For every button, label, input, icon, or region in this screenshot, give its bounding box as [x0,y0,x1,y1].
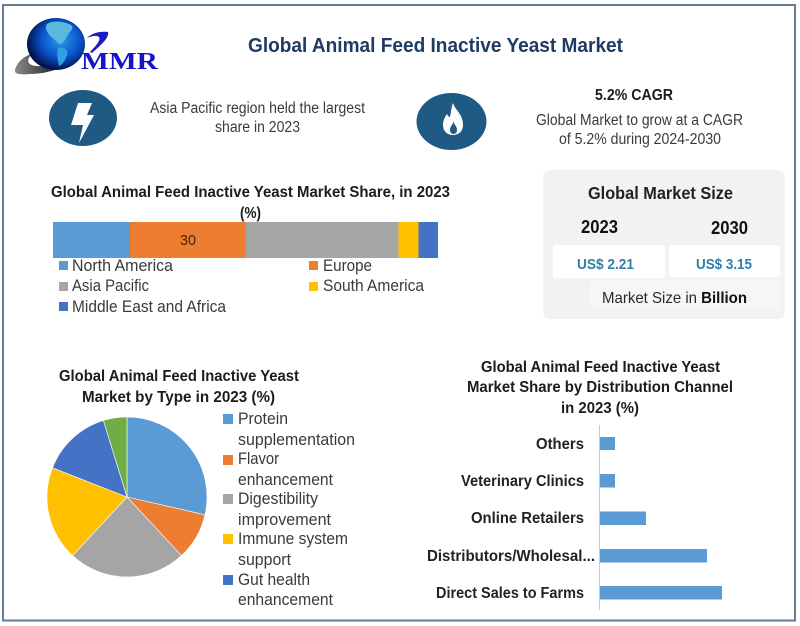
card: 2023 value [553,245,665,278]
heading: global market size: Global Market Size [588,183,733,203]
heading: share by distribution channel: Global Animal Feed Inactive Yeast [481,359,721,376]
text: CAGR callout [536,87,743,148]
legend: market by type: support [238,551,291,569]
text: CAGR callout: 5.2% CAGR [595,87,673,104]
legend: regional share [59,257,425,316]
bar chart: distribution channel: Distributors/Wholesal... [427,548,595,565]
heading: market by type: Market by Type in 2023 (%) [82,389,275,406]
heading: market share by region [51,184,450,222]
legend: market by type: enhancement [238,591,333,609]
logo: MMR globe [15,18,158,75]
heading: market share by region: Global Animal Feed Inactive Yeast Market Share, in 2023 [51,184,450,201]
legend: market by type: Flavor [238,450,279,468]
card: 2030 value: US$ 3.15 [696,256,752,273]
note: market size in billion [590,281,780,309]
stacked bar chart: regional share: 30 [180,232,196,249]
bar chart: distribution channel [427,425,722,610]
bar chart: distribution channel: Online Retailers [471,510,584,527]
legend: market by type: Digestibility [238,490,319,508]
heading: share by distribution channel [467,359,733,417]
stacked bar chart: regional share [53,222,438,258]
icon: flame [416,93,486,150]
legend: market by type: Gut health [238,571,310,589]
legend: market by type [223,410,355,609]
bar chart: distribution channel: Direct Sales to Farms [436,585,584,602]
year 2030: 2030 [711,218,748,238]
legend: regional share: Europe [323,257,372,275]
card: 2030 value [669,245,780,277]
legend: regional share: Middle East and Africa [72,298,227,316]
legend: market by type: supplementation [238,431,355,449]
title: Global Animal Feed Inactive Yeast Market [248,35,623,57]
text: Asia Pacific callout [150,100,366,136]
bar chart: distribution channel: Veterinary Clinics [461,473,584,490]
pie chart: market by type [47,417,207,577]
legend: regional share: Asia Pacific [72,277,149,295]
heading: share by distribution channel: Market Share by Distribution Channel [467,379,733,396]
icon: lightning bolt [49,90,117,146]
legend: market by type: Immune system [238,530,348,548]
bar chart: distribution channel: Others [536,436,584,453]
text: Asia Pacific callout: Asia Pacific region held the largest [150,100,366,117]
logo: MMR globe: MMR [81,48,158,75]
text: Asia Pacific callout: share in 2023 [215,119,300,136]
year 2023: 2023 [581,217,618,237]
heading: market share by region: (%) [240,205,261,222]
legend: market by type: enhancement [238,471,333,489]
heading: share by distribution channel: in 2023 (%) [561,400,639,417]
note: market size in billion: Market Size in Billion [602,290,747,307]
text: CAGR callout: Global Market to grow at a CAGR [536,112,743,129]
card: 2023 value: US$ 2.21 [577,256,634,273]
legend: regional share: South America [323,277,425,295]
panel: global market size [543,170,785,319]
heading: market by type [59,368,300,406]
text: CAGR callout: of 5.2% during 2024-2030 [559,131,721,148]
legend: regional share: North America [72,257,174,275]
legend: market by type: Protein [238,410,288,428]
legend: market by type: improvement [238,511,331,529]
heading: market by type: Global Animal Feed Inactive Yeast [59,368,300,385]
